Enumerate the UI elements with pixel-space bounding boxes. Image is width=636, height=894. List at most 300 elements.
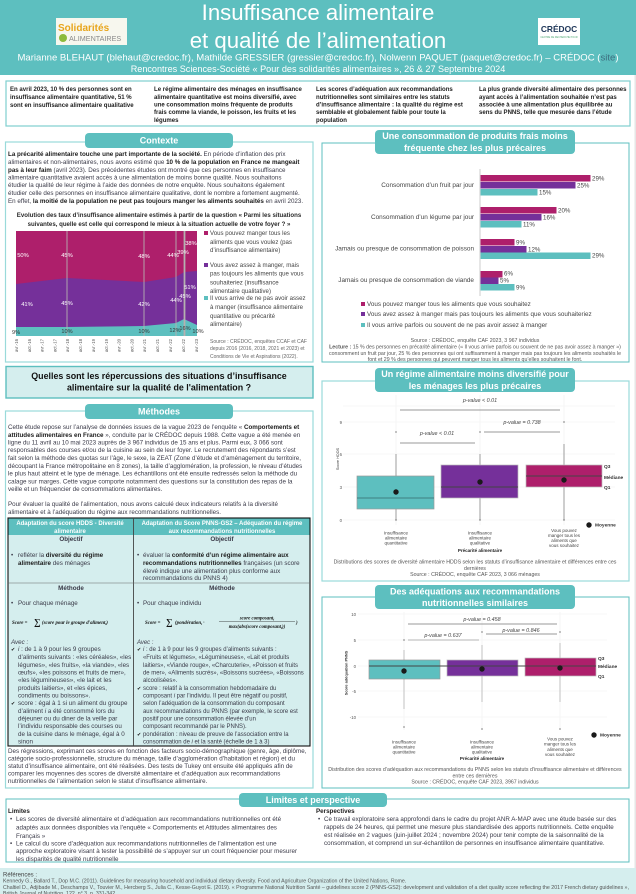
finding 4: ayant accès à l’alimentation souhaitée n’est pas xyxy=(479,95,617,101)
method row: • xyxy=(11,600,13,607)
formula HDDS xyxy=(12,617,108,627)
objectives row: • xyxy=(11,552,13,559)
group labels: aliments que xyxy=(547,747,573,752)
limits text: Les scores de diversité alimentaire et d’adéquation aux recommandations nutritionnelles ont été xyxy=(16,816,282,823)
chart title: suivantes, quelle est celle qui correspond le mieux à la situation actuelle de votre foyer ? » xyxy=(28,221,291,228)
chart source: Conditions de Vie et Aspirations (2022). xyxy=(210,354,298,360)
methods text: découpant la France métropolitaine en 8 zones), la taille d’agglomération, la profession, le niveau d’études xyxy=(8,463,302,470)
list: PNNS definitions: consommation de i et la santé (échelle de 1 à 3) xyxy=(143,740,269,746)
methods text: le plus haut atteint et le type de ménage. Les échantillons ont été ensuite redressés selon la méthode du xyxy=(8,470,298,478)
data labels: 44% xyxy=(170,298,182,304)
bar values: 5% xyxy=(500,278,509,284)
quartile labels: Q3 xyxy=(598,656,605,662)
heading: nutritional adequacy: Des adéquations aux recommandations xyxy=(390,586,560,596)
chart legend: Vous pouvez manger tous les xyxy=(210,230,290,237)
finding 4 xyxy=(479,87,627,116)
objectives row: refléter la diversité du régime xyxy=(18,552,104,559)
heading: fresh products: Une consommation de produits frais moins xyxy=(382,131,568,141)
methods text: responsables des courses et/ou de la cuisine au sein de leur foyer. Le recrutement des répondants s’est xyxy=(8,447,296,454)
list: PNNS definitions xyxy=(136,640,304,746)
list: PNNS definitions: laitiers», «Viande rouge», «Charcuterie», «Poisson et fruits xyxy=(143,663,298,669)
context text: La précarité alimentaire touche une part importante de la société. En période d’inflation des prix xyxy=(8,151,286,158)
finding 2: alimentaire quantitative est moins diversifié, avec xyxy=(154,95,297,101)
limits text xyxy=(8,808,297,863)
x axis dates xyxy=(14,338,199,352)
significance brackets: p-value = 0.458 xyxy=(462,617,501,623)
data labels: 10% xyxy=(61,329,73,335)
list: HDDS definitions: ✔ xyxy=(11,701,15,707)
finding 3: nutritionnelles sont similaires entre les statuts xyxy=(316,95,450,101)
group labels: quantitative xyxy=(384,540,408,546)
panel: Contexte xyxy=(6,133,313,362)
box plot: HDDS: 9 xyxy=(340,420,343,425)
finding 3: Les scores d’adéquation aux recommandations xyxy=(316,87,453,93)
box plot: PNNS xyxy=(344,612,621,761)
bar values: 25% xyxy=(577,182,590,190)
box plot: PNNS: 0 xyxy=(354,664,357,669)
key findings box xyxy=(6,81,630,126)
method row: • xyxy=(137,600,139,607)
table column headers: Adaptation du Score PNNS-GS2 – Adéquation du régime xyxy=(142,521,303,527)
research question: Quelles sont les répercussions des situations d’insuffisance xyxy=(31,371,287,381)
table column headers: alimentaire xyxy=(54,529,87,535)
list: PNNS definitions: «Fruits et légumes», «Légumineuses», «Lait et produits xyxy=(143,655,289,661)
quartile labels: Q1 xyxy=(604,485,611,491)
research question: alimentaire sur la qualité de l'alimentation ? xyxy=(67,382,251,392)
adequacy caption: Distribution des scores d’adéquation aux recommandations du PNNS selon les statuts d’insuffisance alimentaire et différences xyxy=(328,767,622,773)
list: HDDS definitions xyxy=(10,639,131,746)
conference line: Rencontres Sciences-Société « Pour des solidarités alimentaires », 26 & 27 Septembre 2024 xyxy=(131,64,505,74)
group labels: alimentaire xyxy=(385,536,407,540)
mean legend: Moyenne xyxy=(595,522,616,528)
list: HDDS definitions: «les légumineuses», «le lait et les xyxy=(18,677,111,684)
context text xyxy=(8,151,303,205)
chart legend: alimentaire) xyxy=(210,321,242,328)
bar values: 9% xyxy=(516,240,525,246)
limits text: adaptés aux données disponibles via l’enquête « Comportements et Attitudes alimentaires des xyxy=(16,824,277,832)
table column headers xyxy=(16,521,303,535)
data labels: 41% xyxy=(21,302,33,308)
formula PNNS: ) xyxy=(295,621,298,626)
references: Chaltiel D., Adjibade M., Deschamps V., Touvier M., Hercberg S., Julia C., Kesse-Guyot E. (2019). « Programme National Nutrition Santé – guidelines score 2 (PNNS-GS2): development and validation of a diet quality score reflecting the 2017 French dietary guidelines », xyxy=(3,885,629,891)
group labels: Précarité alimentaire xyxy=(458,548,503,553)
data labels: 48% xyxy=(138,254,150,260)
methods text: Pour évaluer la qualité de l’alimentation, nous avons calculé deux indicateurs relatifs à la diversité xyxy=(8,501,278,508)
finding 2: une consommation moins fréquente de produits xyxy=(154,102,293,108)
group labels: Insuffisance xyxy=(468,530,492,536)
finding 1: En avril 2023, 10 % des personnes sont en xyxy=(10,87,132,93)
list: HDDS definitions: d’aliment i a été consommé lors du xyxy=(18,708,115,715)
bar values: 29% xyxy=(592,252,605,260)
significance brackets xyxy=(400,398,560,443)
finding 2 xyxy=(154,87,303,124)
data labels: 12% xyxy=(169,328,181,334)
authors: Marianne BLEHAUT (blehaut@credoc.fr), Mathilde GRESSIER (gressier@credoc.fr), Nolwenn PAQUET (paquet@credoc.fr) – CRÉDOC (site) xyxy=(17,52,619,64)
adequacy caption xyxy=(328,767,622,786)
methods text: alimentaire et à l’adéquation du régime aux recommandations nutritionnelles. xyxy=(8,509,221,516)
finding 3 xyxy=(316,87,463,124)
data labels: 42% xyxy=(138,302,150,308)
data labels xyxy=(12,241,204,336)
heading: fresh products: fréquente chez les plus précaires xyxy=(404,143,546,153)
limits text: Limites xyxy=(8,808,30,815)
x axis dates: oct.-21 xyxy=(155,338,160,352)
regression text: nutritionnelles de l’alimentation selon le statut d’insuffisance alimentaire. xyxy=(8,778,208,785)
formula HDDS: ) xyxy=(105,621,108,626)
formula PNNS: max(abs(score composant xyxy=(229,625,281,630)
x axis dates: oct.-16 xyxy=(27,338,32,352)
perspectives text: • xyxy=(318,816,320,823)
list: HDDS definitions: i : de 1 à 9 pour les 9 groupes xyxy=(18,646,101,653)
x axis dates: oct.-22 xyxy=(181,338,186,352)
limits text: Le calcul du score d’adéquation aux recommandations nutritionnelles de l’alimentation est une xyxy=(16,840,277,848)
chart title xyxy=(17,212,302,228)
objectives row: • xyxy=(137,552,139,559)
list: HDDS definitions: de la cuisine dans le ménage, égal à 0 xyxy=(18,731,125,738)
formula PNNS: i xyxy=(201,622,202,626)
chart legend: alimentaire qualitative) xyxy=(210,288,271,295)
group labels: quantitative xyxy=(392,750,416,754)
logo: Solidarités Alimentaires: Solidarités xyxy=(58,23,110,34)
heading: Contexte xyxy=(85,133,233,148)
significance brackets: p-value = 0.637 xyxy=(423,633,463,639)
group labels: Insuffisance xyxy=(392,740,416,744)
methods text: attitudes alimentaires en France », conduite par le CRÉDOC depuis 1988. Cette vague a été menée en xyxy=(8,432,301,439)
regression text: statut d’insuffisance alimentaire, ont été réalisées. Des tests de Tukey ont ensuite été appliqués afin de xyxy=(8,763,293,770)
limits text: • xyxy=(10,840,12,848)
formula PNNS: i xyxy=(281,626,282,630)
chart legend: pas toujours les aliments que vous xyxy=(210,270,304,278)
list: HDDS definitions: sinon xyxy=(18,738,33,746)
heading: nutritional adequacy: nutritionnelles similaires xyxy=(422,598,528,608)
bar values: 15% xyxy=(539,190,552,196)
perspectives text xyxy=(316,808,616,847)
list: PNNS definitions: i : de 1 à 9 pour les 9 groupes d’aliments suivants : xyxy=(143,647,277,653)
finding 2: Le régime alimentaire des ménages en insuffisance xyxy=(154,87,303,93)
data labels: 50% xyxy=(17,253,29,259)
diversity caption: dernières xyxy=(464,566,486,572)
list: PNNS definitions: score : relatif à la consommation hebdomadaire du xyxy=(143,686,276,692)
adequacy caption: Source : CRÉDOC, enquête CAF 2023, 3967 individus xyxy=(411,778,539,786)
list: HDDS definitions: l’individu responsable des courses ou xyxy=(18,723,122,730)
perspectives text: rappels de 24 heures, qui permet une mesure plus standardisée des apports nutritionnels. Cette enquête xyxy=(324,824,614,831)
context text: étudier celle des personnes en insuffisance alimentaire qualitative, dont le nombre a fortement augmenté. xyxy=(8,190,300,197)
category labels xyxy=(335,182,475,284)
x axis dates: oct.-18 xyxy=(78,338,83,352)
list: HDDS definitions: d’aliments suivants : «les céréales», «les xyxy=(18,654,131,661)
group labels: vous souhaitez xyxy=(545,752,576,757)
quartile labels: Médiane xyxy=(604,475,624,481)
list: PNNS definitions: pondération : niveau de preuve de l’association entre la xyxy=(143,732,289,738)
data labels: 45% xyxy=(61,253,73,259)
perspectives text: Ce travail exploratoire sera approfondi dans le cadre du projet ANR A-MAP avec une étude basée sur des xyxy=(324,816,616,823)
context text: pas à leur faim (avril 2023). Des précédentes études ont montré que ces personnes en insuffisance xyxy=(8,167,286,174)
formula PNNS: Score = xyxy=(145,621,161,626)
objectives row: recommandations nutritionnelles françaises (un score xyxy=(143,560,300,567)
panel: nutritional adequacy xyxy=(322,585,629,788)
method row: Méthode xyxy=(209,585,235,592)
logo: Solidarités Alimentaires xyxy=(56,18,127,45)
adequacy caption: entre ces dernières xyxy=(453,774,498,780)
formula PNNS: score composant xyxy=(240,616,273,622)
list: PNNS definitions: composant recommandé par le PNNS). xyxy=(143,724,247,730)
significance brackets: p-value = 0.846 xyxy=(501,628,540,634)
formula PNNS: (pondération xyxy=(175,621,201,626)
methods text: veille et un fréquencier de consommations alimentaires. xyxy=(8,486,163,493)
box plot: PNNS: 10 xyxy=(351,612,357,617)
formula PNNS: ∑ xyxy=(166,617,172,627)
finding 3: semblable et globalement faible pour toute la xyxy=(316,110,446,116)
bar values: 16% xyxy=(543,214,556,222)
logo: CRÉDOC: CRÉDOC xyxy=(541,23,577,34)
bar chart source and reading note xyxy=(329,337,621,363)
table column headers: aux recommandations nutritionnelles xyxy=(169,529,276,535)
perspectives text: Perspectives xyxy=(316,808,355,815)
heading: Contexte: Contexte xyxy=(140,136,178,146)
research question xyxy=(6,366,313,398)
references xyxy=(0,868,636,894)
x axis dates: avr.-20 xyxy=(116,338,122,352)
heading: limits: Limites et perspective xyxy=(266,795,360,805)
methods text: Cette étude repose sur l’analyse de données issues de la vague 2023 de l’enquête « Comportements et xyxy=(8,424,299,431)
finding 1: sont en insuffisance alimentaire qualitative xyxy=(10,103,134,109)
context text: En effet, la moitié de la population ne peut pas toujours manger les aliments souhaités en avril 2023. xyxy=(8,198,303,205)
panel: Méthodes xyxy=(6,404,313,788)
panel: limits and perspectives xyxy=(6,793,629,863)
bar chart legend: Vous pouvez manger tous les aliments que vous souhaitez xyxy=(367,301,531,308)
data labels: 39% xyxy=(177,250,189,256)
x axis dates: avr.-18 xyxy=(65,338,70,352)
list: HDDS definitions: déjeuner ou du diner de la veille par xyxy=(18,716,117,722)
method row xyxy=(11,585,235,607)
chart legend: à manger (insuffisance alimentaire xyxy=(210,304,304,311)
formula PNNS: i xyxy=(273,618,274,622)
chart legend: quantitative ou précarité xyxy=(210,313,276,320)
regression text: comparer les moyennes des scores de diversité alimentaire et d’adéquation aux recommandations xyxy=(8,770,280,778)
list: PNNS definitions: de mer», «Aliments sucrés», «Boissons sucrées», «Boissons xyxy=(143,670,304,676)
finding 4: La plus grande diversité alimentaire des personnes xyxy=(479,87,627,93)
methods text: calage sur marges. Cette vague comporte notamment des questions sur la constitution des repas de la xyxy=(8,478,293,486)
list: HDDS definitions: score : égal à 1 si un aliment du groupe xyxy=(18,700,128,707)
chart legend: d’insuffisance alimentaire) xyxy=(210,247,280,254)
objectives row: Objectif xyxy=(59,536,84,543)
chart source: depuis 2016 (2016, 2018, 2021 et 2023) et xyxy=(210,346,305,352)
logo: CRÉDOC xyxy=(538,18,580,45)
finding 1: insuffisance alimentaire quantitative, 51 % xyxy=(10,95,132,101)
chart legend: Vous avez assez à manger, mais xyxy=(210,262,299,269)
mean legend xyxy=(591,732,621,738)
box plot: PNNS: Score adéquation PNNS xyxy=(344,650,348,695)
list: HDDS definitions: condiments ou boissons». xyxy=(18,692,91,700)
objectives row: évaluer la conformité d’un régime alimentaire aux xyxy=(143,552,289,559)
quartile labels xyxy=(604,464,624,491)
diversity caption: Source : CRÉDOC, enquête CAF 2023, 3 066 ménages xyxy=(410,571,540,578)
regression text: Des régressions, exprimant ces scores en fonction des facteurs socio-démographique (genre, âge, diplôme, xyxy=(8,748,307,755)
group labels: Insuffisance xyxy=(384,530,408,536)
group labels: qualitative xyxy=(472,750,493,754)
objectives row: Objectif xyxy=(210,536,235,543)
quartile labels xyxy=(598,656,618,680)
data labels: 45% xyxy=(61,301,73,307)
context text: alimentaires et non-alimentaires, nous avons estimé que 10 % de la population en France ne mangeait xyxy=(8,159,299,166)
category labels: Consommation d’un fruit par jour xyxy=(381,182,475,189)
quartile labels: Médiane xyxy=(598,664,618,670)
data labels: 45% xyxy=(179,294,191,300)
box plot: HDDS xyxy=(335,395,624,553)
heading: fresh products xyxy=(375,130,575,154)
list: PNNS definitions: ✔ xyxy=(137,647,141,653)
x axis dates: avr.-19 xyxy=(91,338,96,352)
context text: étudier la qualité de leur régime à l’aide des données de notre enquête. Nous souhaitons également xyxy=(8,182,285,189)
method row: Pour chaque ménage xyxy=(18,600,78,607)
data labels: 10% xyxy=(138,329,150,335)
category labels: Jamais ou presque de consommation de viande xyxy=(338,277,474,284)
references: Kennedy G., Ballard T., Dop M.C. (2011). Guidelines for measuring household and individual dietary diversity. Food and Agriculture Organization of the United Nations, Rome. xyxy=(3,878,406,884)
significance brackets xyxy=(408,617,557,640)
box plot: PNNS: -10 xyxy=(350,715,357,720)
methods text xyxy=(8,424,302,516)
logo: CRÉDOC: CENTRE DE RECHERCHE POUR xyxy=(540,36,578,39)
bar values: 29% xyxy=(592,176,605,182)
bar values: 6% xyxy=(504,270,513,278)
heading: limits xyxy=(239,793,387,807)
quartile labels: Q3 xyxy=(604,464,611,470)
regression text xyxy=(8,748,307,785)
group labels: manger tous les xyxy=(548,533,581,538)
method row: Méthode xyxy=(58,585,84,592)
bar values: 20% xyxy=(558,208,571,214)
bar chart legend xyxy=(361,301,592,329)
list: PNNS definitions: positif pour une consommation élevée d’un xyxy=(143,716,256,722)
box plot: PNNS: 5 xyxy=(354,638,357,643)
methods text: fait selon la méthode des quotas sur l’âge, le sexe, la ZEAT (Zone d’étude et d’aménagement du territoire, xyxy=(8,455,301,462)
title xyxy=(190,0,446,53)
list: PNNS definitions: aux recommandations du PNNS (par exemple, le score est xyxy=(143,709,298,715)
formula HDDS: Score = xyxy=(12,621,28,626)
chart legend: aliments que vous voulez (pas xyxy=(210,239,292,246)
limits text: approche exploratoire visant à tester la possibilité de s’appuyer sur un court fréquencier pour mesurer xyxy=(16,848,297,855)
limits text: les disparités de qualité nutritionnelle xyxy=(16,856,119,863)
method row: Pour chaque individu xyxy=(143,600,202,607)
bar chart source and reading note: Lecture : 15 % des personnes en précarité alimentaire (« Il vous arrive parfois ou souvent de ne pas avoir assez à manger ») xyxy=(329,344,621,350)
heading: dietary diversity: Un régime alimentaire moins diversifié pour xyxy=(381,369,569,379)
bar chart source and reading note: Source : CRÉDOC, enquête CAF 2023, 3 967 individus xyxy=(411,337,540,344)
list: HDDS definitions: œufs», «les poissons et fruits de mer», xyxy=(18,670,126,676)
diversity caption: Distributions des scores de diversité alimentaire HDDS selon les statuts d’insuffisance alimentaire et différences entre ces xyxy=(334,560,617,566)
title: et qualité de l’alimentation xyxy=(190,28,446,53)
x axis dates: avr.-22 xyxy=(168,338,173,352)
x axis dates: avr.-16 xyxy=(14,338,19,352)
box plot: PNNS: -5 xyxy=(352,689,357,694)
group labels xyxy=(384,528,581,553)
list: PNNS definitions: Avec : xyxy=(136,640,154,646)
group labels: alimentaire xyxy=(393,744,415,750)
heading: Méthodes xyxy=(85,404,233,419)
limits text: Français » xyxy=(16,833,46,840)
significance brackets: p-value = 0.738 xyxy=(502,420,541,426)
list: PNNS definitions: alcoolisées». xyxy=(143,678,178,684)
bar chart source and reading note: font et 29 % des personnes qui peuvent manger tous les aliments qu’elles souhaitent le font. xyxy=(368,357,582,363)
group labels: Précarité alimentaire xyxy=(460,756,505,761)
heading: nutritional adequacy xyxy=(375,585,575,609)
list: HDDS definitions: légumes», «les fruits», «la viande», «les xyxy=(18,662,129,669)
references: Références : xyxy=(3,872,37,878)
bar chart legend: Il vous arrive parfois ou souvent de ne pas avoir assez à manger xyxy=(367,322,547,329)
heading: dietary diversity: les ménages les plus précaires xyxy=(409,381,541,391)
box plot: HDDS: Score HDDS xyxy=(335,447,340,470)
logo: Solidarités Alimentaires: ALIMENTAIRES xyxy=(69,34,121,43)
group labels xyxy=(392,736,577,761)
group labels: Vous pouvez xyxy=(547,736,574,742)
finding 2: légumes xyxy=(154,118,179,124)
bar chart xyxy=(335,169,605,296)
methods text: ligne du 11 avril au 10 mai 2023 auprès de 3 967 individus de 15 ans et plus. Parmi eux, 3 066 sont xyxy=(8,440,283,446)
chart legend xyxy=(204,230,306,328)
list: HDDS definitions: Avec : xyxy=(10,639,29,646)
title: Insuffisance alimentaire xyxy=(202,0,434,25)
group labels: qualitative xyxy=(470,540,491,546)
objectives row: recommandations du PNNS 4) xyxy=(143,575,228,582)
panel: fresh product consumption xyxy=(322,130,629,363)
chart title: Evolution des taux d’insuffisance alimentaire estimés à partir de la question « Parmi les situations xyxy=(17,212,302,219)
objectives row: élevé indique une alimentation plus conforme aux xyxy=(143,568,281,575)
quartile labels: Q1 xyxy=(598,674,605,680)
data labels: 10% xyxy=(192,329,204,335)
chart legend: Il vous arrive de ne pas avoir assez xyxy=(210,295,306,302)
group labels: vous souhaitez xyxy=(549,543,580,548)
x axis dates: avr.-23 xyxy=(194,338,199,352)
x axis dates: avr.-21 xyxy=(142,338,147,352)
finding 4: sens du PNNS, telle que mesurée dans l’étude xyxy=(479,110,612,116)
bar chart legend: Vous avez assez à manger mais pas toujours les aliments que vous souhaiteriez xyxy=(367,311,592,318)
x axis dates: oct.-17 xyxy=(52,338,58,352)
finding 4: associée à une alimentation plus équilibrée au xyxy=(479,102,613,108)
list: HDDS definitions: ✔ xyxy=(11,647,15,653)
formula HDDS: ∑ xyxy=(34,617,40,627)
methods table xyxy=(8,518,310,746)
bar values: 11% xyxy=(523,222,535,228)
formula HDDS: i xyxy=(105,622,106,626)
list: HDDS definitions: produits laitiers», et «les épices, xyxy=(18,685,107,692)
group labels: manger tous les xyxy=(544,742,577,746)
data labels: 9% xyxy=(12,330,20,336)
mean legend: Moyenne xyxy=(600,732,621,738)
chart source: Source : CRÉDOC, enquêtes CCAF et CAF xyxy=(210,338,307,345)
table column headers: Adaptation du score HDDS - Diversité xyxy=(16,521,124,527)
group labels: Insuffisance xyxy=(470,740,494,744)
heading: Méthodes: Méthodes xyxy=(138,406,180,416)
chart source xyxy=(210,338,307,360)
bar values: 12% xyxy=(528,246,541,254)
finding 2: frais comme la viande, le poisson, les fruits et les xyxy=(154,110,297,116)
data labels: 44% xyxy=(167,253,179,259)
list: PNNS definitions: composant i par l’individu. Il peut être négatif ou positif, xyxy=(143,694,288,700)
panel: dietary diversity xyxy=(322,368,629,581)
chart legend: souhaiteriez (insuffisance xyxy=(210,280,279,286)
finding 3: population xyxy=(316,118,347,124)
list: PNNS definitions: ✔ xyxy=(137,686,141,692)
formula PNNS: )) xyxy=(281,625,286,630)
list: PNNS definitions: ✔ xyxy=(137,732,141,738)
bar values: 9% xyxy=(516,284,525,292)
data labels: 16% xyxy=(179,326,191,332)
diversity caption xyxy=(334,560,617,578)
objectives row xyxy=(11,536,300,582)
perspectives text: consommation, et comprend un sur-échantillon de personnes en insuffisance alimentaire quantitative. xyxy=(324,840,605,847)
header banner xyxy=(0,0,636,75)
group labels: alimentaire xyxy=(469,536,491,540)
data labels: 38% xyxy=(185,241,197,247)
